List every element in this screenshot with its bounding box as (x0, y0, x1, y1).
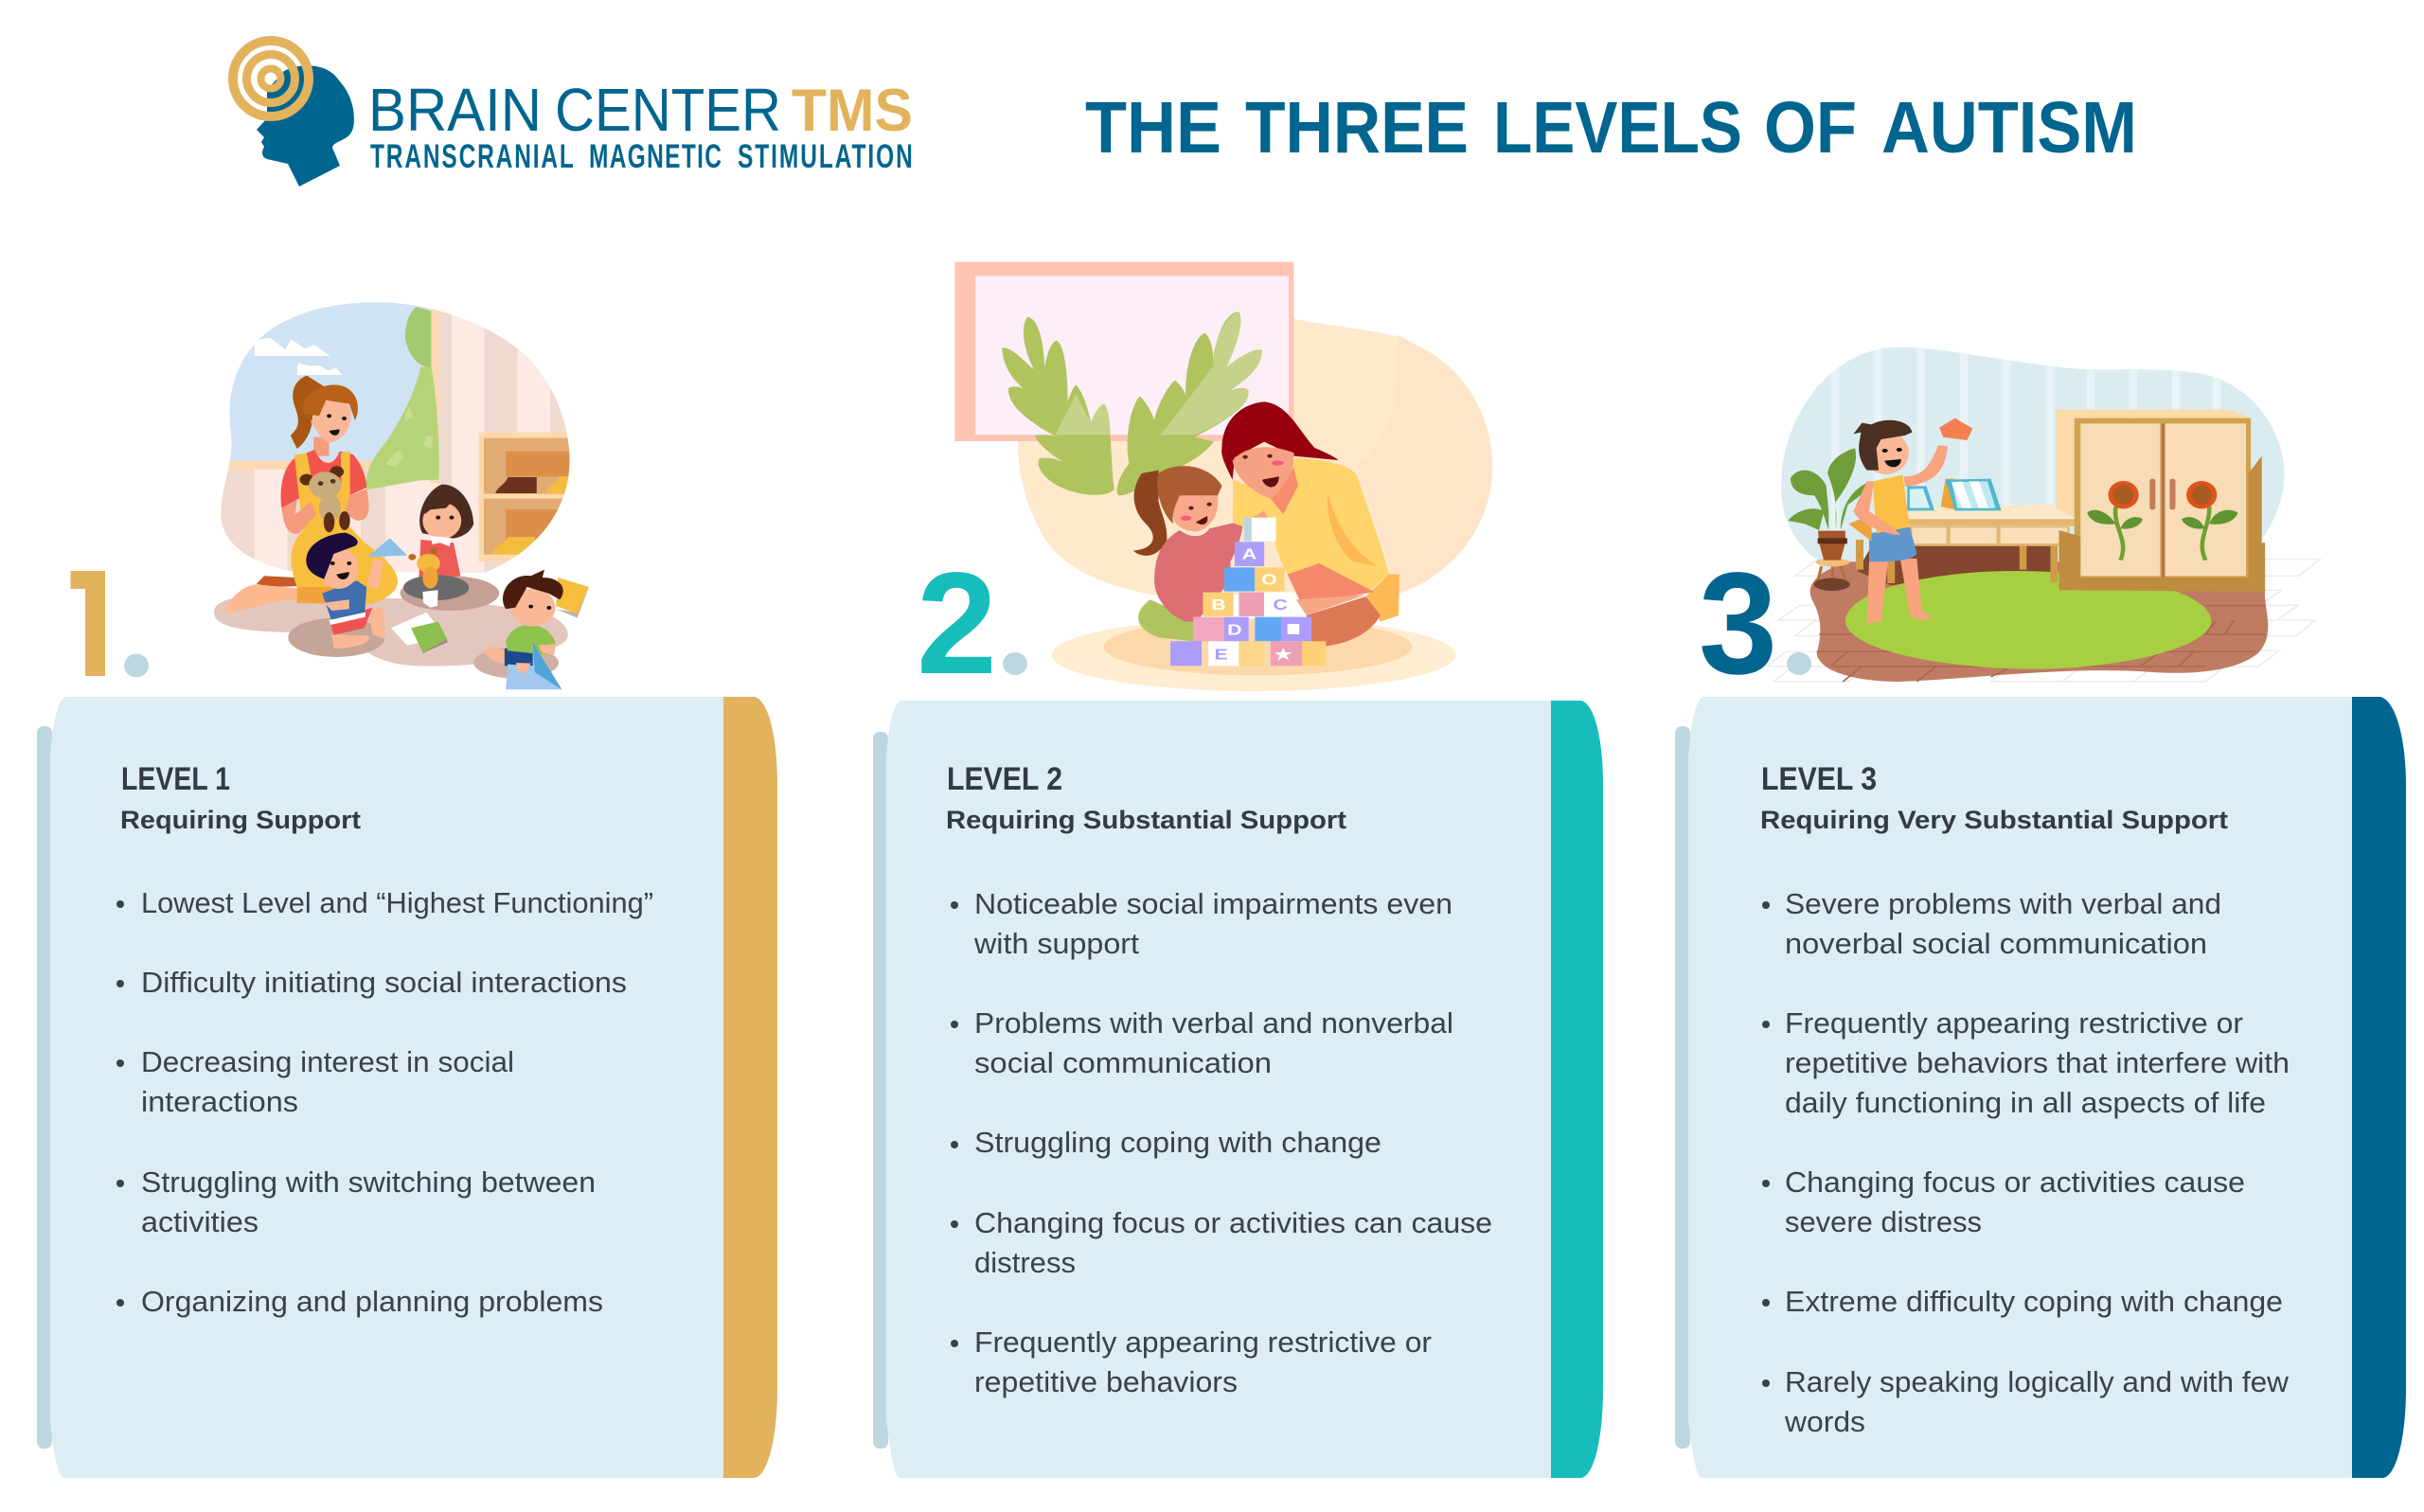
girl with toy (403, 485, 473, 608)
heading: level 3: LEVEL 3 (1761, 761, 1877, 797)
alphabet blocks: ★ (1274, 647, 1292, 664)
boy (1848, 418, 1972, 623)
alphabet blocks: O (1261, 572, 1277, 589)
bullet list: level 1: Decreasing interest in social (141, 1045, 514, 1078)
background blob (1018, 319, 1492, 595)
bullet list: level 2: Frequently appearing restrictive or (974, 1325, 1432, 1359)
plant leaves (1002, 311, 1262, 495)
title (1085, 87, 2137, 169)
bullet list: level 3: noverbal social communication (1785, 927, 2207, 960)
alphabet blocks: E (1214, 647, 1228, 664)
subheading: level 1: Requiring Support (120, 806, 361, 834)
bullet list: level 3: severe distress (1785, 1205, 1982, 1238)
bullet list: level 1: Organizing and planning problems (141, 1285, 603, 1318)
teacher (224, 376, 398, 613)
shelf (479, 433, 573, 561)
logo tagline: STIMULATION (738, 139, 913, 175)
bullet list: level 1 (116, 886, 653, 1318)
bullet list: level 3: Changing focus or activities cause (1785, 1165, 2245, 1199)
books on floor (391, 613, 448, 653)
bullet list: level 3: Severe problems with verbal and (1785, 887, 2221, 920)
floor (1810, 546, 2268, 682)
curtain (366, 307, 439, 489)
rug (1052, 618, 1455, 691)
daughter (1133, 466, 1243, 642)
bullet list: level 3: Rarely speaking logically and with few (1785, 1365, 2290, 1398)
bullet list: level 2: with support (973, 927, 1139, 960)
logo tagline (370, 139, 913, 175)
window frame (954, 262, 1293, 441)
bullet list: level 2: Changing focus or activities can cause (974, 1206, 1492, 1239)
bullet list: level 1: Difficulty initiating social interactions (141, 966, 627, 999)
title: OF (1764, 87, 1857, 169)
panel: level 3 (1675, 697, 2406, 1478)
panel: level 2 (873, 701, 1603, 1478)
title: THE (1085, 87, 1221, 169)
boy with paper plane (307, 533, 407, 649)
bullet list: level 1: interactions (141, 1085, 298, 1118)
alphabet blocks: B (1211, 596, 1226, 614)
bullet list: level 1: Struggling with switching between (141, 1165, 596, 1199)
heading: level 1: LEVEL 1 (121, 761, 230, 797)
wall (1781, 347, 2284, 574)
logo tagline: MAGNETIC (589, 139, 722, 175)
title: THREE (1245, 87, 1469, 169)
logo tagline: TRANSCRANIAL (370, 139, 574, 175)
bullet list: level 2: social communication (974, 1046, 1272, 1079)
logo: Brain Center TMS (233, 41, 913, 187)
title: LEVELS (1493, 87, 1742, 169)
desk (1856, 479, 2075, 583)
bullet list: level 3 (1762, 887, 2290, 1438)
sunflower door art (2087, 481, 2237, 560)
number 1: 1 (68, 544, 150, 707)
bullet list: level 3: daily functioning in all aspects of life (1785, 1086, 2266, 1119)
bullet list: level 2: Problems with verbal and nonverbal (974, 1006, 1453, 1040)
mother (1221, 401, 1399, 647)
subheading: level 2: Requiring Substantial Support (946, 806, 1346, 834)
heading: level 2: LEVEL 2 (947, 761, 1062, 797)
plant on stool (1788, 448, 1867, 591)
bullet list: level 3: words (1784, 1405, 1865, 1438)
alphabet blocks: C (1273, 596, 1288, 614)
bullet list: level 1: activities (141, 1205, 258, 1238)
number 3: 3 (1699, 543, 1777, 704)
bullet list: level 2: distress (974, 1246, 1076, 1279)
logo wordmark: Brain Center: CENTER (555, 76, 781, 144)
number 2: 2 (917, 543, 997, 704)
toddler with book (481, 570, 589, 689)
title: AUTISM (1881, 87, 2137, 169)
logo wordmark: Brain Center (368, 76, 781, 144)
bullet list: level 3: Frequently appearing restrictive or (1785, 1006, 2243, 1040)
teddy bear (300, 466, 350, 532)
panel: level 1 (37, 697, 777, 1478)
bullet list: level 2: Struggling coping with change (974, 1126, 1381, 1159)
illustration: teacher with children playing (214, 296, 589, 689)
floor tile outlines (1767, 560, 2320, 682)
bullet list: level 2 (951, 887, 1492, 1398)
floor (214, 596, 568, 667)
icon: head silhouette with target rings (233, 41, 354, 187)
subheading: level 3: Requiring Very Substantial Support (1760, 806, 2228, 834)
logo wordmark: TMS: TMS (792, 78, 913, 144)
wardrobe (2057, 410, 2265, 592)
bullet list: level 2: repetitive behaviors (974, 1365, 1238, 1398)
bullet list: level 1: Lowest Level and “Highest Functioning” (141, 886, 653, 919)
alphabet blocks (1170, 518, 1326, 666)
bullet list: level 3: Extreme difficulty coping with change (1785, 1285, 2283, 1318)
number 1 (70, 571, 149, 678)
rug (1845, 571, 2211, 669)
alphabet blocks: D (1227, 622, 1242, 639)
logo wordmark: Brain Center: BRAIN (368, 76, 542, 144)
alphabet blocks: A (1242, 546, 1257, 563)
illustration: mother and daughter stacking blocks (954, 262, 1492, 691)
bullet list: level 3: repetitive behaviors that interfere with (1785, 1046, 2290, 1079)
picture frames (1907, 479, 2002, 510)
illustration: boy playing in room (1767, 341, 2320, 682)
bullet list: level 2: Noticeable social impairments even (974, 887, 1453, 920)
